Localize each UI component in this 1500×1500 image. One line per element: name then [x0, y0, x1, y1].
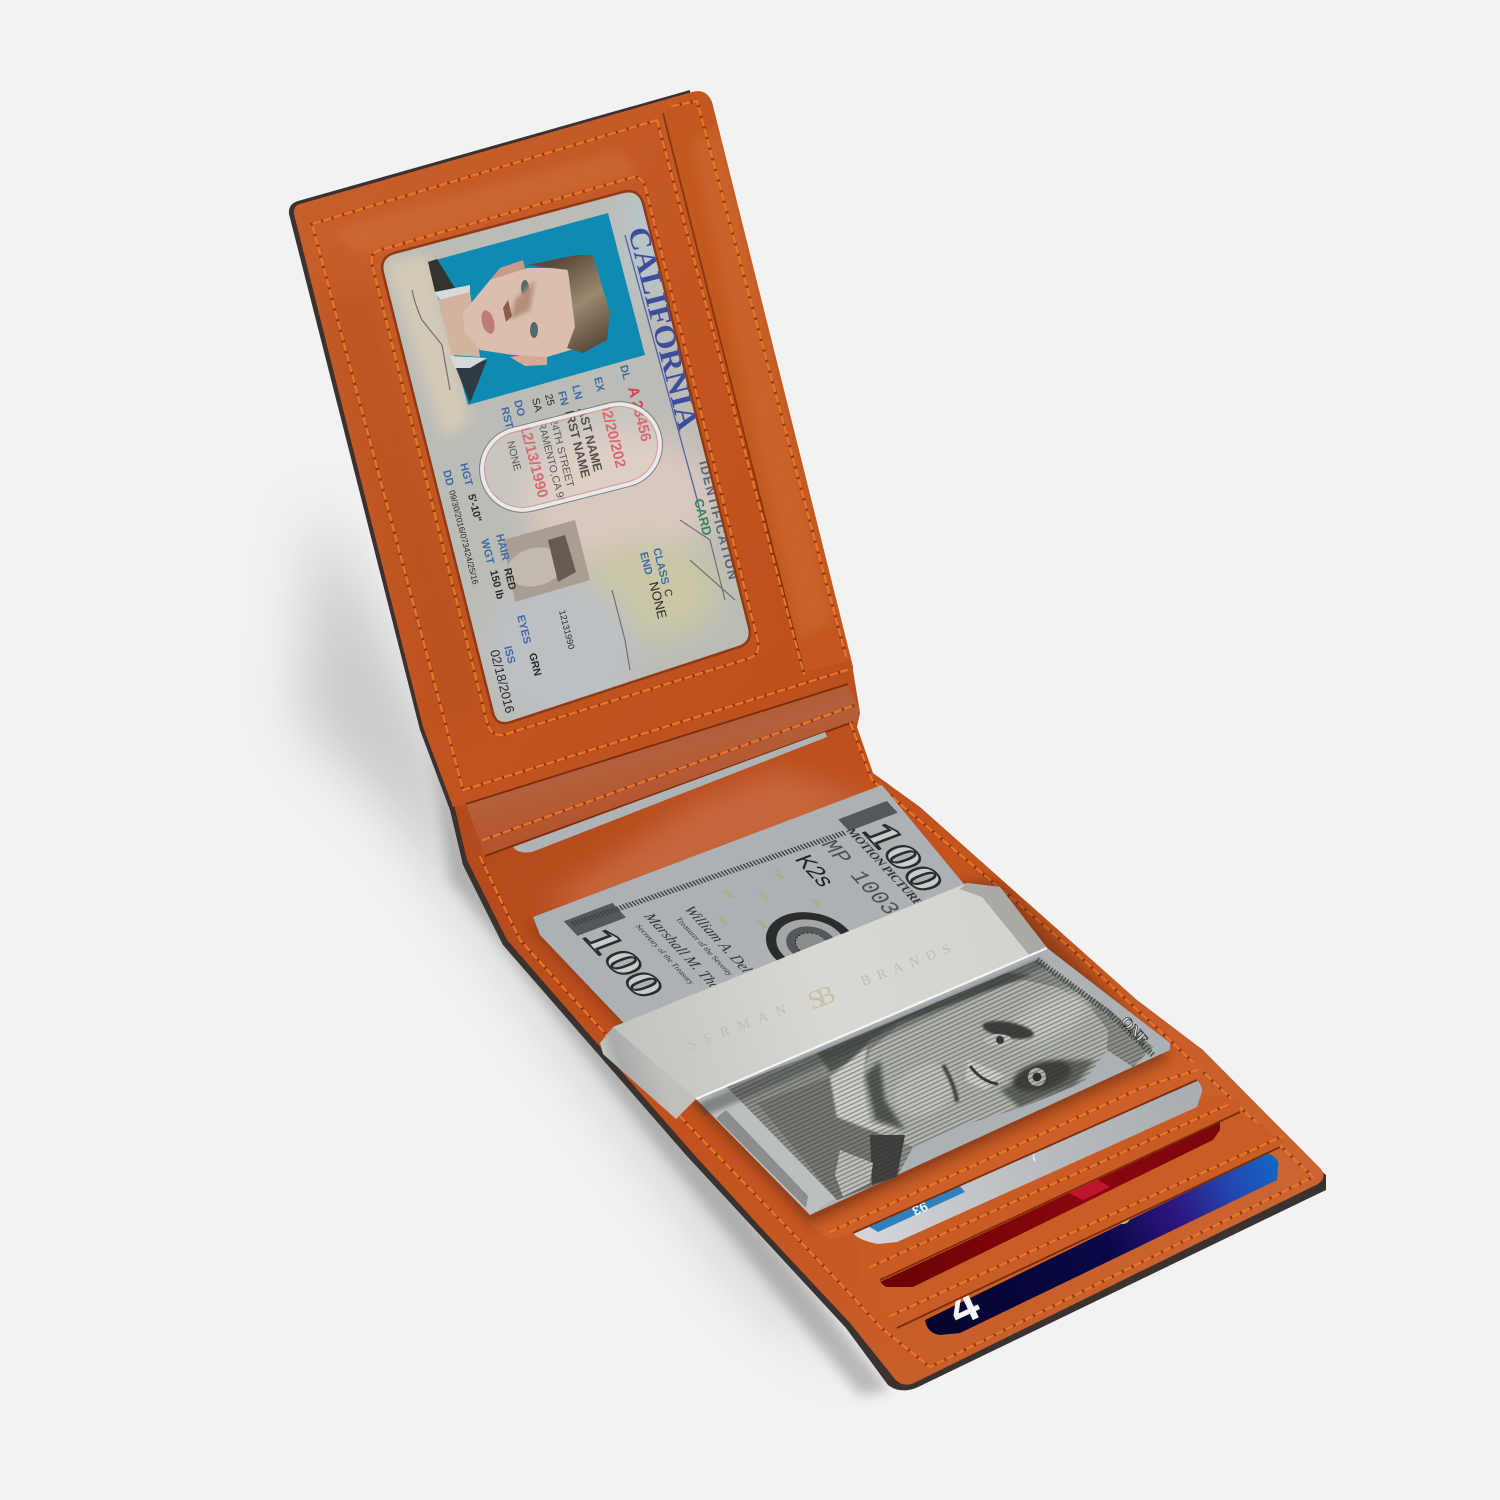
clip brand: BRANDS: [859, 942, 953, 990]
coat shadow: [870, 1135, 905, 1185]
collar: [435, 285, 470, 300]
first name: IRST NAME: [562, 409, 593, 479]
licence number: A 23456: [624, 385, 654, 443]
treasurer caption: Treasurer of the Seventy: [673, 916, 735, 977]
map lines: [412, 290, 735, 670]
red card stripe: [1063, 1177, 1110, 1200]
slot ridge above silver card: [808, 1052, 1205, 1240]
expiry label: EX: [591, 376, 607, 394]
eye socket shade: [510, 280, 535, 320]
street: 24TH STREET: [547, 418, 576, 489]
endorsement: END: [637, 551, 654, 576]
card number: 12131990: [557, 609, 577, 650]
ear: [490, 260, 525, 280]
silver card digits: 93: [909, 1198, 930, 1219]
window recess: [383, 192, 749, 722]
series: K2s: [789, 851, 841, 890]
green numerals: 100: [755, 889, 771, 901]
card tint grey: [485, 580, 635, 720]
ear: [510, 352, 547, 366]
silver card blue bar: [868, 1184, 965, 1232]
eye: [530, 322, 538, 338]
face: [463, 268, 577, 357]
signature: William A. Delano: [680, 904, 771, 991]
last name label: LN: [569, 384, 584, 401]
dd label: DD: [440, 469, 456, 487]
clip highlight: [696, 948, 1047, 1099]
engraved corner: [564, 903, 626, 936]
expiry date: 02/20/202: [596, 401, 629, 470]
note fold shadow: [716, 1110, 808, 1208]
blue card: [925, 1153, 1278, 1337]
class value: C: [661, 588, 675, 598]
top panel stitching: [312, 101, 847, 790]
grey card edge in hinge slot: [513, 732, 827, 852]
silver card: [853, 1080, 1202, 1244]
eye: [521, 280, 529, 296]
card base: [384, 192, 749, 722]
green numerals: 100: [753, 918, 770, 930]
date of birth: 12/13/1990: [516, 423, 551, 500]
cast shadow: [300, 500, 890, 1395]
restrictions label: RST: [498, 406, 515, 430]
lower panel stitching: [480, 722, 1313, 1367]
green numerals: 100: [807, 897, 824, 909]
blue card green ring: [1117, 1211, 1129, 1223]
one text: ONE: [1117, 1014, 1151, 1049]
height label: HGT: [457, 462, 475, 488]
mouth: [943, 1065, 957, 1102]
money clip: [600, 883, 1047, 1119]
licence number label: DL: [617, 364, 632, 381]
lower collar: [450, 356, 487, 368]
ID window: [381, 190, 751, 724]
bill printing group: [557, 800, 990, 1036]
engraved ground: [727, 960, 1153, 1200]
photo backdrop: [428, 213, 645, 405]
card type: CARD: [691, 497, 715, 537]
nose: [965, 1060, 1005, 1090]
face shade: [1000, 1060, 1095, 1108]
green numerals: [698, 866, 824, 940]
lower jacket: [456, 360, 487, 403]
caption: MOTION PICTURE: [843, 826, 927, 907]
city: RAMENTO,CA 95: [535, 421, 567, 505]
head: [860, 980, 1108, 1147]
hologram oval: [470, 392, 672, 522]
first name label: FN: [555, 390, 570, 407]
eyes label: EYES: [514, 614, 533, 645]
serial: MP 10031: [814, 837, 915, 928]
pocket strip below top panel: [466, 684, 860, 856]
engraved corner: [838, 801, 898, 831]
hair value: RED: [501, 567, 518, 592]
state name: CALIFORNIA: [621, 224, 705, 434]
ID card: [384, 192, 749, 722]
weight label: WGT: [478, 538, 496, 566]
class: CLASS: [650, 547, 671, 586]
hair: [817, 972, 1032, 1072]
top panel leather: [294, 91, 853, 807]
slot ridge above blue card: [872, 1112, 1285, 1330]
cravat: [830, 1047, 903, 1130]
date of birth label: DO: [511, 399, 527, 418]
restrictions: NONE: [504, 440, 523, 472]
right eye: [1010, 1058, 1072, 1093]
blue card digit: 4: [939, 1274, 988, 1337]
treasury seal: [755, 906, 868, 982]
upper jacket: [428, 259, 455, 292]
small portrait face: [503, 542, 567, 592]
slot ridge above red card: [857, 1095, 1240, 1285]
hair: [527, 255, 610, 353]
secretary caption: Secretary of the Treasury: [633, 923, 697, 986]
endorsement value: NONE: [646, 580, 670, 620]
small portrait hair: [548, 535, 576, 582]
note base: [533, 785, 1170, 1215]
denomination: 100: [572, 923, 675, 1003]
last name: AST NAME: [575, 406, 605, 473]
card tint beige: [385, 255, 470, 440]
signature: Marshall M. Thorp: [639, 911, 734, 1002]
weight value: 150 lb: [487, 569, 506, 601]
lips: [479, 309, 497, 335]
engraved border: [572, 824, 844, 933]
wallet: [289, 90, 1326, 1390]
neck: [438, 292, 480, 357]
dd number: 09/30/2016/073424/25/16: [447, 489, 481, 586]
red card: [880, 1122, 1220, 1287]
green numerals: 100: [720, 888, 737, 900]
cheek: [895, 1064, 954, 1116]
bill shadow on leather: [530, 880, 1172, 1225]
issue date: 02/18/2016: [487, 648, 518, 715]
eyes value: GRN: [526, 652, 543, 677]
coat: [757, 1077, 903, 1200]
clip shadow: [696, 958, 1046, 1116]
note fold: [697, 1090, 840, 1215]
banknote stack: [533, 785, 1170, 1215]
issue label: ISS: [501, 645, 517, 665]
right fold band on top panel: [320, 91, 852, 730]
height: 5'-10": [465, 493, 484, 523]
right border engraving: [1037, 960, 1153, 1055]
identification: IDENTIFICATION: [696, 459, 741, 581]
small portrait: [503, 520, 590, 602]
lower panel leather: [453, 670, 1324, 1385]
jaw shadow: [865, 1060, 905, 1130]
green numerals: 100: [771, 869, 787, 880]
street number: 25: [542, 393, 557, 407]
card tint yellow: [580, 540, 720, 640]
hair label: HAIR: [493, 533, 511, 562]
lower panel sheen: [552, 766, 855, 908]
left eye: [984, 1034, 1012, 1046]
clip wrap: [600, 1027, 710, 1119]
card tint blue: [618, 192, 667, 304]
wallet dark outer edge: [289, 90, 1326, 1390]
Franklin portrait: [727, 960, 1153, 1200]
engraved hatch: [727, 960, 1153, 1200]
photo: [428, 213, 645, 405]
clip monogram: SB: [804, 979, 839, 1016]
ruffle: [835, 1150, 873, 1197]
clip tip shading: [960, 883, 1047, 956]
state underline: [625, 235, 700, 510]
nostril: [970, 1066, 998, 1084]
clip brand: SERMAN: [686, 1002, 789, 1054]
forehead highlight: [1014, 986, 1094, 1046]
clip face: [613, 883, 1047, 1099]
city prefix: SA: [529, 397, 544, 413]
nose: [503, 300, 512, 322]
brow: [981, 1020, 1035, 1041]
denomination: 100: [851, 817, 954, 898]
silver card numeral: 7: [1024, 1144, 1043, 1168]
green numerals: 100: [715, 914, 731, 926]
card tint rose: [525, 430, 715, 570]
